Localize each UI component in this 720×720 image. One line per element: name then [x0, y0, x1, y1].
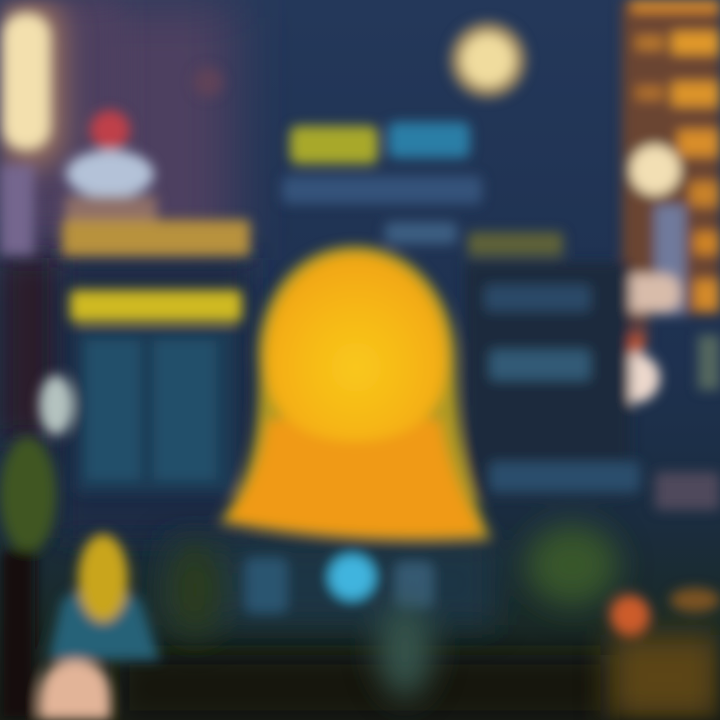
bottom icons [245, 554, 433, 613]
bottom teal strip [165, 540, 495, 625]
left orange banner [62, 220, 250, 256]
green bush left [0, 437, 56, 720]
left blue panel [76, 328, 236, 493]
bottom right orange lights [610, 588, 720, 720]
right panel text line 1 [485, 285, 590, 311]
right panel text line 2 [490, 350, 590, 380]
right side faint block [655, 472, 720, 510]
right info panel [465, 232, 720, 510]
person figure [39, 534, 160, 720]
lamp: left bright [0, 0, 62, 255]
cyan circle icon [329, 554, 375, 600]
central bell icon [220, 246, 490, 540]
bell body [228, 420, 482, 536]
bell outline [220, 246, 490, 540]
right panel text line 3 [490, 462, 640, 492]
right panel heading [468, 232, 563, 256]
right building with orange windows [622, 0, 720, 315]
title [282, 122, 482, 244]
right lamp post and lights [602, 145, 720, 403]
left white light [39, 375, 73, 435]
left yellow header bar [70, 290, 242, 322]
faint round ornament [193, 67, 223, 97]
bell head [266, 255, 446, 442]
green bushes bottom [167, 525, 618, 698]
lamp: hanging round [450, 22, 526, 98]
left tower [65, 110, 157, 222]
